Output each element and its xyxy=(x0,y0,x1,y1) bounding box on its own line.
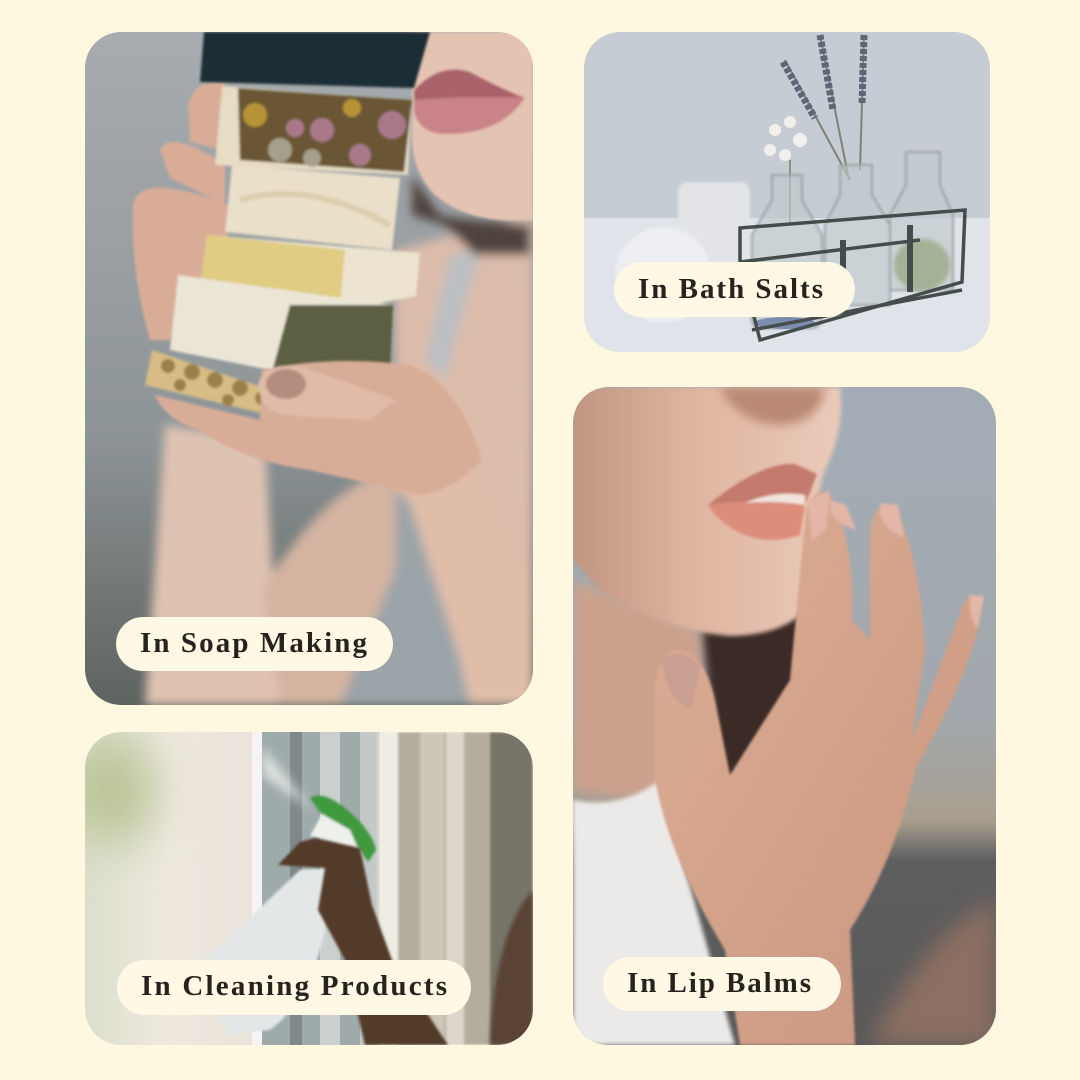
left hand fingers xyxy=(133,81,228,340)
label: in cleaning products xyxy=(117,960,471,1015)
label: in soap making xyxy=(116,617,393,671)
panel: lip balm photo xyxy=(573,387,996,1045)
neck xyxy=(573,580,708,800)
dark hair xyxy=(697,615,798,776)
label: in lip balms: In Lip Balms xyxy=(627,967,811,999)
panel: cleaning products photo xyxy=(65,732,533,1045)
arm and hand xyxy=(278,838,448,1045)
label: in bath salts xyxy=(614,262,855,317)
person at the edge xyxy=(490,890,533,1045)
panel: bath salts photo xyxy=(584,32,990,352)
label: in lip balms xyxy=(603,957,841,1011)
nose shadow xyxy=(720,387,825,425)
face xyxy=(573,387,841,636)
lips xyxy=(708,464,817,540)
soap stack xyxy=(145,32,430,420)
candles behind the bottles xyxy=(615,182,750,323)
glass bottles xyxy=(752,152,953,328)
label: in soap making: In Soap Making xyxy=(140,627,368,659)
white shirt xyxy=(573,780,735,1045)
spray mist xyxy=(262,745,312,810)
right hand holding soap xyxy=(155,361,482,495)
body and shoulder xyxy=(145,175,533,705)
blurred background shape xyxy=(870,900,996,1045)
metal rack xyxy=(740,210,965,340)
label: in cleaning products: In Cleaning Products xyxy=(141,970,447,1002)
hand with fingers xyxy=(655,490,984,1045)
label: in bath salts: In Bath Salts xyxy=(638,273,823,305)
face and lips xyxy=(412,32,533,221)
spray bottle xyxy=(205,796,376,1034)
panel: soap making photo xyxy=(85,32,533,705)
lavender and flowers xyxy=(783,35,864,225)
curtains xyxy=(378,732,533,1045)
